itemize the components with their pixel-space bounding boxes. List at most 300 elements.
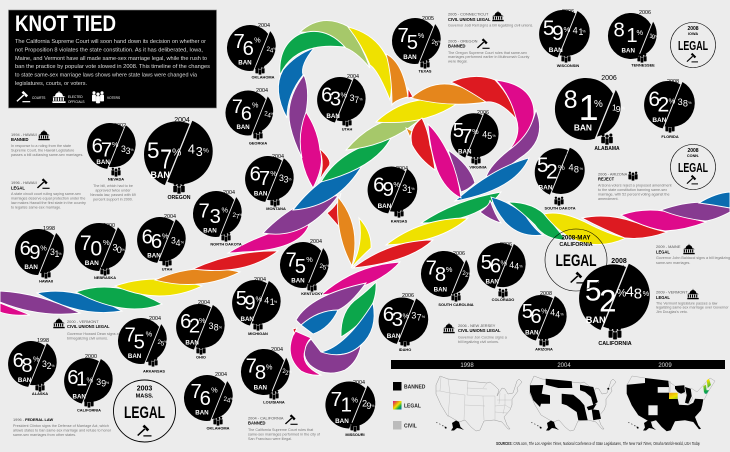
pie: Florida: % <box>668 97 675 106</box>
pie: Kansas <box>368 166 417 224</box>
pie: California 2000: 6 <box>67 367 78 389</box>
pie: Florida: 2 <box>657 93 669 116</box>
pie: Florida: 6 <box>648 88 660 111</box>
pie: Arizona: BAN <box>525 330 539 337</box>
pie: Arkansas <box>118 316 168 374</box>
pie: Oregon <box>144 117 213 201</box>
pie: Virginia: 5 <box>487 131 492 141</box>
note: 2005 Connecticut: 2005 - CONNECTICUT <box>448 12 489 16</box>
legal circle: Iowa 2008: 2008 <box>687 26 699 32</box>
pie: Alabama: 8 <box>564 87 577 114</box>
legal circle: Iowa 2008 <box>670 22 716 68</box>
pie: North Dakota: 2 <box>233 212 237 219</box>
pie: Florida <box>644 79 695 139</box>
pie: California 2000: BAN <box>72 393 86 400</box>
pie: Arizona <box>518 291 567 352</box>
pie: Tennessee <box>608 10 659 68</box>
pie: South Dakota: % <box>580 167 584 171</box>
note: 2006 Arizona: Arizona voters reject a proposed amendment <box>598 184 672 188</box>
note: 2006 Arizona: 2006 - ARIZONA <box>598 172 628 176</box>
intro text: The California Supreme Court will soon hand down its decision on whether or <box>15 39 206 45</box>
legal circle: Massachusetts 2003: 2003 <box>137 386 152 392</box>
pie: Georgia: % <box>270 112 274 116</box>
map legend <box>393 382 426 430</box>
pie: Utah upper: 6 <box>321 84 332 106</box>
pie: Alabama: % <box>621 106 626 112</box>
map: 2004 <box>530 376 616 431</box>
pie: Utah upper: 3 <box>330 89 341 111</box>
pie: Kansas: 1 <box>407 185 412 195</box>
pie: Montana: 3 <box>284 175 289 185</box>
pie: California 2008 Nov <box>579 258 650 347</box>
pie: Louisiana: 8 <box>255 362 266 384</box>
pie: North Dakota: 7 <box>236 214 240 221</box>
pie: Oregon: 7 <box>160 144 172 175</box>
legend icons: OFFICIALS <box>68 100 84 104</box>
pie: Montana: 2004 <box>272 154 284 160</box>
pie: Nevada: % <box>130 148 134 152</box>
pie: Nevada: 3 <box>126 146 131 156</box>
note: Nevada: Nevada law, passed with 69 <box>90 193 136 197</box>
pie: Ohio: OHIO <box>196 354 206 360</box>
note: 2009 Maine: same-sex marriages. <box>656 261 690 265</box>
pie: Oregon: 3 <box>196 145 203 159</box>
pie: Louisiana: 7 <box>246 355 257 377</box>
pie: Louisiana: % <box>288 370 292 374</box>
pie: Montana: 6 <box>250 163 261 185</box>
pie: Ohio: 3 <box>209 321 214 331</box>
note: 2005 Oregon: The Oregon Supreme Court rules that same-sex <box>448 51 527 55</box>
pie: Montana: % <box>270 169 277 178</box>
pie: Idaho <box>379 293 428 352</box>
pie: Alaska: 2 <box>47 361 52 371</box>
note: 2000 Vermont: bill legalizing civil unions. <box>67 336 108 340</box>
pie: Florida: 3 <box>678 97 683 107</box>
pie: California 2008 Nov: 8 <box>634 286 642 303</box>
pie: Nebraska: 0 <box>117 245 122 255</box>
note: 2009 Maine: LEGAL <box>656 250 670 254</box>
pie: North Dakota: % <box>239 213 243 217</box>
note: 2000 Vermont: CIVIL UNIONS LEGAL <box>67 324 110 329</box>
note: 2006 Arizona: amendment. <box>598 197 618 201</box>
note: 2009 Vermont: LEGAL <box>656 295 670 300</box>
note: 1996 federal law: President Clinton signs the Defense of Marriage Act, which <box>13 424 109 428</box>
pie: Utah lower: 4 <box>176 238 181 248</box>
pie: Nebraska: 3 <box>112 242 118 252</box>
pie: Ohio: 8 <box>214 323 219 333</box>
pie: Michigan: 9 <box>244 292 256 314</box>
pie: Kansas: 9 <box>383 178 394 201</box>
pie: Kentucky: BAN <box>291 277 305 284</box>
note: 1996 federal law <box>13 417 112 437</box>
pie: Kentucky: % <box>326 264 330 268</box>
pie: Missouri: 2 <box>362 398 367 408</box>
pie: Arkansas: 2 <box>158 339 162 346</box>
pie: Colorado <box>477 242 526 302</box>
pie: Idaho: IDAHO <box>399 347 411 352</box>
note: 2006 New Jersey: CIVIL UNIONS LEGAL <box>458 328 501 333</box>
note: 1996 federal law: allows states to ban same-sex marriage and refuse to honor <box>13 428 112 432</box>
pie: Tennessee: 1 <box>649 34 653 40</box>
pie: Arkansas: 2004 <box>149 316 161 322</box>
note: 1994 Hawaii: passes a bill outlawing same-sex marriages. <box>11 153 83 157</box>
note: 2004 California: San Francisco were illegal. <box>248 437 292 441</box>
pie: Wisconsin: % <box>582 30 586 34</box>
pie: Georgia: 4 <box>267 113 271 119</box>
pie: North Dakota: 7 <box>199 201 210 223</box>
pie: Oklahoma lower: 2 <box>224 396 228 403</box>
pie: Nebraska: % <box>122 248 126 252</box>
pie: Michigan: BAN <box>240 316 254 323</box>
pie: Wisconsin: 9 <box>552 22 564 45</box>
note: 1996 federal law: same-sex marriages from other states. <box>13 433 76 437</box>
pie: Michigan: % <box>274 300 278 304</box>
pie: Georgia: 7 <box>232 96 243 118</box>
pie: Montana: 7 <box>259 168 270 190</box>
note: 2009 Maine: Governor John Baldacci signs a bill legalizing <box>656 256 730 260</box>
pie: Colorado: % <box>519 264 523 268</box>
intro text: not Proposition 8 violates the state constitution. As it has deliberated, Iowa, <box>15 48 203 54</box>
pie: Arizona: 4 <box>555 310 560 320</box>
pie: Nevada: 3 <box>121 144 126 154</box>
intro text: legislatures, courts, or voters. <box>15 81 87 87</box>
pie: Wisconsin: 1 <box>578 27 583 37</box>
note: 1996 Hawaii: LEGAL <box>11 186 25 190</box>
pie: Nevada: 2002 <box>114 123 126 129</box>
pie: Tennessee: 9 <box>652 35 656 41</box>
pie: Nevada: 6 <box>92 135 103 157</box>
pie: Hawaii: 9 <box>29 242 41 264</box>
map section: year bar: 1998 <box>460 363 474 369</box>
pie: Montana: BAN <box>254 191 268 198</box>
pie: Oregon: 2004 <box>174 117 190 124</box>
pie: Oklahoma upper: 7 <box>233 31 245 53</box>
legal circle: Massachusetts 2003: LEGAL <box>124 403 165 422</box>
pie: Utah lower: 2004 <box>164 214 176 220</box>
pie: Nebraska: NEBRASKA <box>94 275 116 280</box>
pie: Alaska: 8 <box>21 355 33 377</box>
pie: Nevada: 7 <box>101 140 112 162</box>
pie: California 2000: % <box>87 375 94 384</box>
pie: Alabama: % <box>594 99 603 110</box>
pie: Arkansas: 5 <box>134 331 145 353</box>
note: 2006 New Jersey: Governor Jon Corzine signs a <box>458 336 508 340</box>
pie: Oklahoma lower: 7 <box>190 381 202 403</box>
note: 2006 New Jersey <box>443 323 508 344</box>
pie: Louisiana: 2004 <box>271 347 283 353</box>
pie: Colorado: BAN <box>485 278 499 285</box>
pie: Alaska: 3 <box>42 359 47 369</box>
pie: Kansas: % <box>411 187 415 191</box>
legal circle: California 2008 May: 2008-MAY <box>561 234 591 242</box>
note: 2004 California: 2004 - CALIFORNIA <box>248 416 284 420</box>
pie: North Dakota: BAN <box>203 227 217 234</box>
pie: Tennessee: % <box>637 28 644 37</box>
note: 1994 Hawaii: Supreme Court, the Hawaii Legislature <box>11 148 74 152</box>
note: 2000 Vermont: 2000 - VERMONT <box>67 319 99 324</box>
pie: Ohio: 2004 <box>198 300 210 306</box>
pie: Florida: FLORIDA <box>661 134 679 139</box>
pie: Georgia: 6 <box>241 103 252 125</box>
note: 2005 Connecticut: Governor Jodi Rell signs a bill legalizing civil unions. <box>448 24 533 28</box>
pie: Oregon: 5 <box>147 138 159 163</box>
pie: California 2000: 9 <box>101 379 106 389</box>
pie: South Carolina: 2 <box>462 271 466 277</box>
note: 2006 New Jersey: bill legalizing civil unions. <box>458 340 499 344</box>
pie: Alaska: 1998 <box>37 338 49 344</box>
note: 1996 Hawaii: to legalize same-sex marriage. <box>11 206 61 210</box>
pie: Florida: 8 <box>683 98 688 108</box>
note: Nevada: approved twice under <box>95 188 131 192</box>
pie: Colorado: 2006 <box>500 242 512 248</box>
pie: Oklahoma upper: BAN <box>238 60 252 67</box>
note: Nevada: percent support in 2000. <box>93 198 133 202</box>
pie: Colorado: 4 <box>509 260 514 270</box>
pie: Colorado: 4 <box>514 262 519 272</box>
pie: Kentucky: 2004 <box>310 239 322 245</box>
pie: South Carolina: 7 <box>426 257 437 279</box>
pie: Idaho: 3 <box>392 308 403 331</box>
pie: Utah upper: 3 <box>350 93 355 103</box>
pie: Montana: MONTANA <box>266 206 286 211</box>
pie: Ohio: 2 <box>189 316 200 338</box>
pie: North Dakota: 3 <box>210 206 221 228</box>
pie: Kansas: 2004 <box>396 166 408 172</box>
map legend: LEGAL <box>404 404 421 410</box>
legal circle: Iowa 2008: IOWA <box>688 32 698 36</box>
pie: Kentucky <box>280 239 330 296</box>
pie: Wisconsin: 4 <box>573 26 578 36</box>
pie: Colorado: % <box>500 259 507 268</box>
note: 2009 Vermont: Jim Douglas's veto. <box>656 310 688 314</box>
intro text <box>15 39 210 87</box>
pie: Arizona: ARIZONA <box>535 346 553 352</box>
note: 2009 Vermont: 2009 - VERMONT <box>656 290 688 294</box>
pie: Nebraska: % <box>103 238 110 247</box>
pie: Alabama: 1 <box>612 102 617 112</box>
pie: Kentucky: 7 <box>286 249 297 271</box>
pie: Utah upper: 7 <box>354 95 359 105</box>
pie: Arkansas: 5 <box>161 341 165 348</box>
pie: California 2000: % <box>106 381 110 385</box>
legend icons: VOTERS <box>107 96 120 100</box>
map: 2009 <box>627 376 715 431</box>
pie: Idaho: 7 <box>417 313 422 323</box>
pie: Virginia: BAN <box>458 148 472 155</box>
pie: Missouri: 1 <box>341 394 352 417</box>
pie: Idaho: 3 <box>411 311 416 321</box>
legal circle: Iowa 2008: LEGAL <box>678 39 708 53</box>
note: 2006 Arizona: to the state constitution banning same-sex <box>598 188 667 192</box>
pie: Missouri: 7 <box>331 388 342 411</box>
pie: Texas: % <box>438 40 442 44</box>
pie: South Dakota: 2006 <box>555 151 567 157</box>
pie: Georgia <box>225 88 274 146</box>
pie: Ohio: % <box>199 316 206 325</box>
legal circle: California 2008 May: LEGAL <box>556 251 596 270</box>
pie: Georgia: 2004 <box>256 88 268 94</box>
pie: Tennessee: BAN <box>622 48 635 55</box>
intro text: to state same-sex marriage laws shows where state laws were changed via <box>15 72 197 78</box>
pie: Wisconsin: 5 <box>543 17 555 40</box>
pie: Nevada: BAN <box>96 159 110 166</box>
pie: South Dakota: 4 <box>569 163 574 173</box>
pie: Nebraska: BAN <box>85 260 99 267</box>
pie: Missouri <box>325 380 375 437</box>
pie: Oklahoma lower: 2004 <box>215 372 227 378</box>
pie: California 2000 <box>64 354 113 412</box>
note: Nevada <box>90 184 136 202</box>
pie: Oklahoma upper <box>227 23 277 80</box>
pie: Michigan: % <box>255 295 262 304</box>
pie: Arizona: 2008 <box>540 291 552 297</box>
note: 2005 Oregon: BANNED <box>448 44 466 48</box>
legend icons: ELECTED <box>68 95 83 99</box>
note: 2005 Connecticut <box>448 11 533 28</box>
sources: SOURCES: CNN.com, The Los Angeles Times, National Conference of State Legislatures, The New York Times, Omaha World-Herald, USA Today <box>496 441 701 446</box>
pie: Tennessee: 2006 <box>639 10 651 16</box>
title: KNOT TIED <box>15 11 116 36</box>
pie: California 2008 Nov: % <box>617 288 627 300</box>
pie: Arizona: 5 <box>522 301 533 323</box>
pie: Hawaii: 3 <box>50 247 55 257</box>
pie: South Carolina: % <box>468 272 472 276</box>
pie: South Carolina: 2 <box>465 273 469 279</box>
map: 1998 <box>436 376 522 431</box>
pie: North Dakota <box>193 190 243 246</box>
pie: Alaska: BAN <box>18 377 32 384</box>
pie: South Dakota: % <box>558 163 565 172</box>
pie: California 2000: 2000 <box>85 354 97 360</box>
pie: Utah upper <box>317 74 366 132</box>
map section: year bar: 2009 <box>658 363 672 369</box>
pie: Wisconsin <box>539 9 590 68</box>
note: Nevada: The bill, which had to be <box>93 184 133 188</box>
pie: Texas: % <box>418 31 425 40</box>
pie: Kansas: 3 <box>402 183 407 193</box>
pie: Utah upper: 2004 <box>347 74 359 80</box>
pie: Kentucky: KENTUCKY <box>301 291 323 296</box>
pie: Oregon: 4 <box>188 142 195 156</box>
pie: Arkansas: ARKANSAS <box>143 368 165 374</box>
pie: Georgia: % <box>252 101 259 110</box>
pie: Colorado: 6 <box>490 255 501 277</box>
pie: Texas: 2005 <box>422 16 434 22</box>
ribbon: rainbow knot <box>0 21 730 375</box>
pie: Oregon: % <box>203 148 209 155</box>
pie: Arizona: 4 <box>550 308 555 318</box>
pie: Alabama: ALABAMA <box>594 146 620 152</box>
pie: Wisconsin: % <box>563 25 570 34</box>
pie: Oklahoma lower: 6 <box>200 388 211 410</box>
pie: Alabama: 2006 <box>601 75 617 82</box>
pie: Oklahoma upper: 2004 <box>258 23 270 29</box>
pie: Louisiana: 2 <box>282 369 286 375</box>
pie: Alaska: 6 <box>13 350 24 372</box>
pie: Idaho: 2006 <box>402 293 414 299</box>
pie: Alaska: ALASKA <box>32 391 48 396</box>
pie: Utah upper: % <box>359 97 363 101</box>
pie: Michigan: 4 <box>264 295 269 305</box>
pie: South Carolina: % <box>446 265 453 274</box>
note: 2000 Vermont: Governor Howard Dean signs a <box>67 332 120 336</box>
pie: Utah lower: 6 <box>151 231 162 253</box>
pie: South Dakota: 5 <box>537 154 549 177</box>
note: 1994 Hawaii: BANNED <box>11 137 29 142</box>
pie: Oklahoma lower: 4 <box>227 398 231 405</box>
pie: Georgia: GEORGIA <box>249 140 267 146</box>
pie: Oregon: BAN <box>151 170 170 180</box>
pie: Hawaii: 6 <box>20 238 31 260</box>
pie: Wisconsin: 2006 <box>562 9 574 15</box>
pie: Colorado: COLORADO <box>492 297 514 302</box>
pie: Arkansas: % <box>164 340 168 344</box>
pie: Missouri: % <box>351 396 358 405</box>
pie: Montana: % <box>288 177 292 181</box>
pie: Idaho: BAN <box>387 333 401 340</box>
pie: Wisconsin: WISCONSIN <box>557 63 579 68</box>
pie: Arkansas: % <box>146 329 153 338</box>
pie: Kentucky: % <box>306 255 313 264</box>
pie: Kentucky: 2 <box>320 263 324 270</box>
note: 2000 Vermont <box>53 318 120 340</box>
pie: Oklahoma upper: 4 <box>270 48 274 55</box>
legal circle: Connecticut 2008 <box>670 144 716 190</box>
note: 2006 Arizona: REJECT <box>598 176 615 182</box>
map legend: CIVIL <box>404 424 417 430</box>
pie: Virginia: % <box>472 127 479 136</box>
pie: Louisiana <box>241 347 292 404</box>
note: 2006 Arizona: marriage, with 52 percent voting against the <box>598 192 670 196</box>
pie: Utah upper: % <box>340 91 347 100</box>
pie: Kansas: BAN <box>378 203 392 210</box>
pie: California 2008 Nov: % <box>643 289 650 298</box>
pie: Virginia: VIRGINIA <box>469 164 487 170</box>
pie: Virginia: % <box>492 134 496 138</box>
note: 2009 Vermont: The Vermont legislature passes a law <box>656 302 718 306</box>
pie: Missouri: 2004 <box>353 380 365 386</box>
pie: California 2008 Nov: BAN <box>586 315 606 325</box>
pie: Louisiana: BAN <box>254 384 268 391</box>
pie: Arizona: % <box>541 306 548 315</box>
note: 2005 Oregon <box>448 38 530 64</box>
pie: California 2008 Nov: 4 <box>626 284 634 301</box>
pie: Virginia <box>451 110 499 170</box>
pie: Colorado: 5 <box>481 252 492 274</box>
pie: Michigan: 2004 <box>254 277 266 283</box>
map legend: BANNED <box>404 384 426 390</box>
pie: Hawaii: BAN <box>24 264 38 271</box>
pie: Tennessee: 8 <box>614 19 625 41</box>
pie: Idaho: 6 <box>383 303 394 326</box>
pie: Virginia: 4 <box>482 129 487 139</box>
pie: Michigan <box>232 277 281 336</box>
pie: South Carolina: 2006 <box>453 251 465 257</box>
pie: California 2000: 1 <box>76 369 87 391</box>
pie: Oklahoma lower <box>184 372 234 430</box>
pie: California 2000: 3 <box>96 377 101 387</box>
map section: year bar: 2004 <box>557 363 571 369</box>
pie: Hawaii <box>15 226 64 284</box>
pie: California 2008 Nov: CALIFORNIA <box>598 341 632 347</box>
pie: Alaska: % <box>51 364 55 368</box>
note: 2005 Connecticut: CIVIL UNIONS LEGAL <box>448 17 491 22</box>
pie: California 2008 Nov: NOV <box>610 265 625 272</box>
pie: Nebraska <box>75 223 126 280</box>
pie: Michigan: MICHIGAN <box>248 331 268 336</box>
pie: Missouri: MISSOURI <box>345 432 365 437</box>
pie: Idaho: % <box>402 312 409 321</box>
